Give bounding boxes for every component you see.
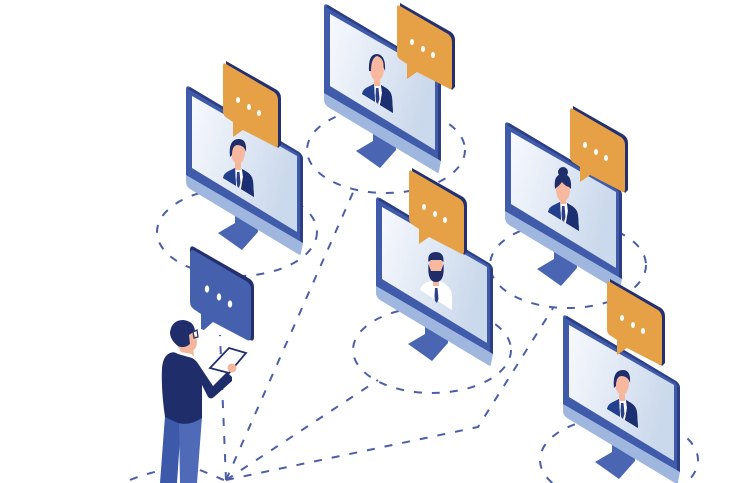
speech bubble 3 [409,168,467,255]
line: to monitor 2 [226,188,355,480]
ellipse: monitor 2 ring [307,107,465,193]
torso and arm [162,352,232,424]
person on monitor 5 [607,370,638,428]
monitor 3 [376,197,493,366]
person on monitor 2 balding [362,54,393,113]
ellipse: monitor 5 ring [540,417,698,483]
monitor 1 [186,86,303,255]
line: to monitor 1 [220,335,226,480]
person holding tablet [160,320,246,483]
ellipse: monitor 4 ring [490,222,646,308]
monitor 2 [324,4,441,173]
dashed network lines [130,107,698,483]
monitor 4 [505,122,622,291]
tablet [210,348,246,373]
dots [205,285,209,293]
person on monitor 1 [223,139,254,197]
legs [160,416,181,483]
ellipse: monitor 1 ring [157,188,317,276]
speech bubble 2 [397,3,455,90]
speech bubble 1 [223,61,281,148]
ellipse: monitor 3 ring [353,307,511,393]
speech bubble 5 [607,279,665,366]
line: to monitor 3 [226,380,378,480]
neck and head [177,338,194,357]
blue speech bubble from person [190,246,254,341]
hand [228,364,236,372]
monitor 5 [563,315,680,483]
person on monitor 4 with hair bun [548,167,579,231]
ellipse: ground ring under person [130,468,226,481]
collar [174,351,194,360]
person on monitor 3 with beard [420,252,452,310]
speech bubble 4 [570,106,628,193]
line: to monitors 4 and 5 [226,308,553,480]
